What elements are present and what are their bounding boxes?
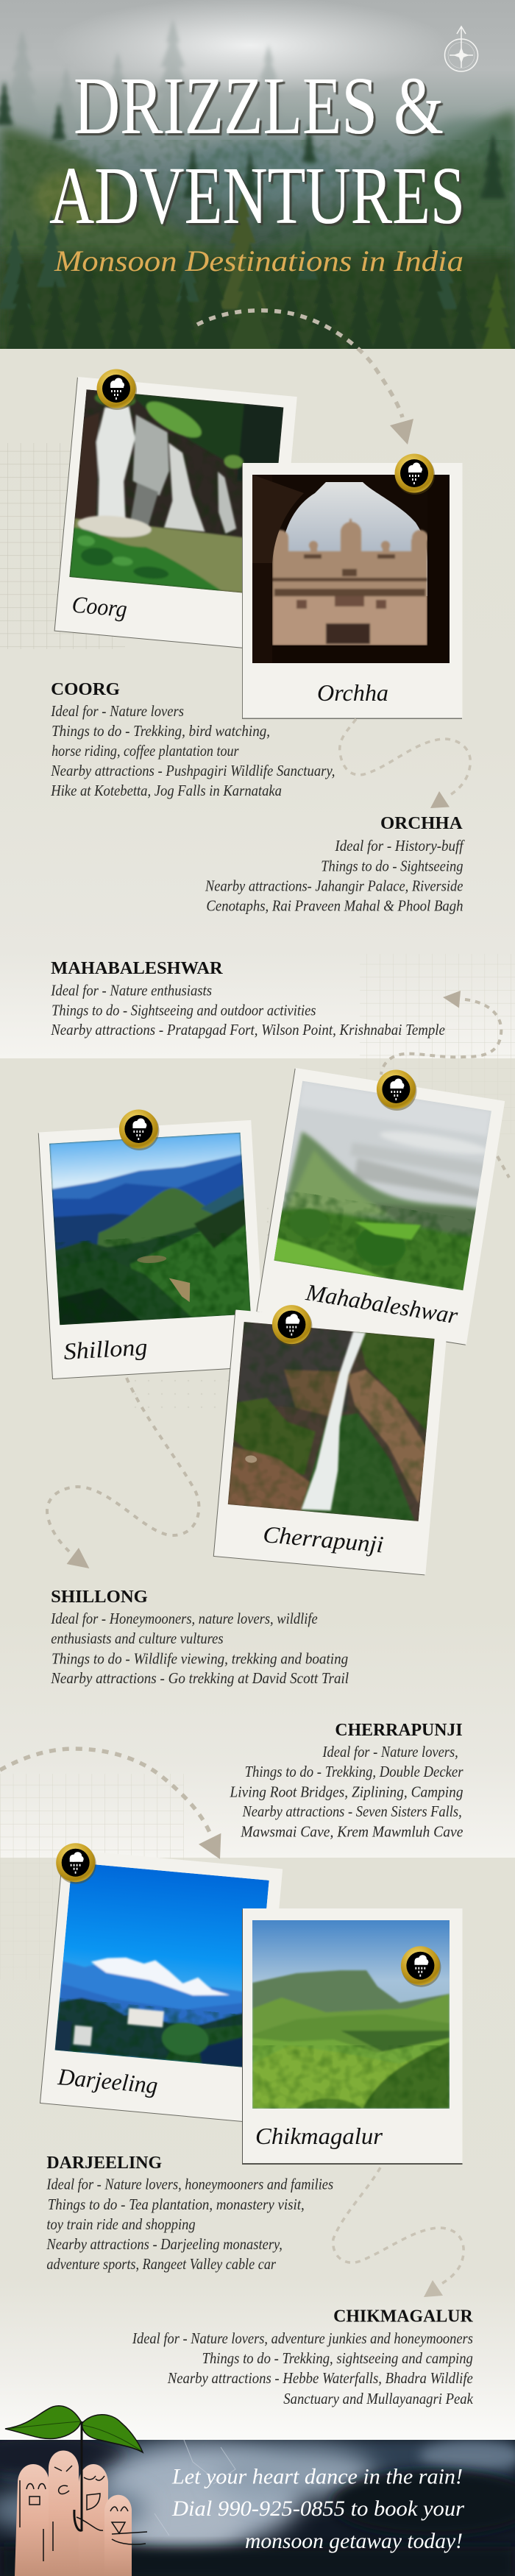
polaroid: orchha <box>242 463 462 719</box>
text block: chikmagalur <box>132 2307 474 2407</box>
body: darjeeling details <box>46 2176 333 2273</box>
page background: section two <box>0 1058 515 1858</box>
arrow: orchha to text <box>340 719 470 808</box>
page background: section three <box>0 1858 515 2440</box>
page background: section one <box>0 349 515 1058</box>
label: chikmagalur: Chikmagalur <box>255 2123 383 2149</box>
call to action text: Let your heart dance in the rain! <box>171 2465 463 2489</box>
call to action text: Dial 990-925-0855 to book your <box>171 2497 464 2521</box>
label: shillong: Shillong <box>63 1334 148 1365</box>
arrow: shillong to text <box>47 1378 199 1568</box>
icon: cherrapunji pin <box>272 1305 312 1346</box>
arrow: hero to orchha <box>197 311 413 445</box>
photo: mahabaleshwar hills <box>274 1080 491 1291</box>
body: darjeeling details: adventure sports, Rangeet Valley cable car <box>46 2255 277 2273</box>
text block: cherrapunji <box>230 1721 464 1841</box>
polaroid: cherrapunji <box>213 1309 447 1575</box>
heading: chikmagalur: CHIKMAGALUR <box>333 2307 473 2326</box>
body: orchha details: Nearby attractions- Jahangir Palace, Riverside <box>205 877 463 895</box>
body: cherrapunji details: Living Root Bridges, Ziplining, Camping <box>230 1783 464 1801</box>
body: shillong details <box>50 1610 349 1687</box>
body: orchha details: Ideal for - History-buff <box>334 837 465 854</box>
body: cherrapunji details: Mawsmai Cave, Krem Mawmluh Cave <box>240 1823 463 1841</box>
photo: cherrapunji falls <box>228 1322 435 1521</box>
body: orchha details: Cenotaphs, Rai Praveen Mahal & Phool Bagh <box>206 896 464 914</box>
body: darjeeling details: toy train ride and shopping <box>46 2215 196 2233</box>
polaroid: darjeeling <box>40 1849 283 2123</box>
body: orchha details: Things to do - Sightseeing <box>321 857 464 874</box>
body: cherrapunji details <box>230 1743 464 1841</box>
body: chikmagalur details: Sanctuary and Mullayanagri Peak <box>283 2390 474 2407</box>
arrow: cherrapunji to darjeeling <box>0 1749 221 1859</box>
heading: darjeeling: DARJEELING <box>46 2154 162 2173</box>
label: darjeeling: Darjeeling <box>56 2063 159 2098</box>
label: coorg: Coorg <box>71 591 128 622</box>
panel: footer call to action <box>0 2406 515 2576</box>
photo: chikmagalur hills <box>252 1920 450 2109</box>
call to action text <box>171 2465 464 2553</box>
body: darjeeling details: Nearby attractions - Darjeeling monastery, <box>46 2235 283 2253</box>
call to action text: monsoon getaway today! <box>245 2529 463 2553</box>
subtitle: Monsoon Destinations in India <box>54 244 464 277</box>
text block: darjeeling <box>46 2154 333 2273</box>
label: cherrapunji: Cherrapunji <box>262 1521 385 1557</box>
body: chikmagalur details: Things to do - Trekking, sightseeing and camping <box>202 2349 473 2367</box>
text block: mahabaleshwar <box>50 959 445 1038</box>
body: shillong details: Things to do - Wildlife viewing, trekking and boating <box>52 1650 348 1668</box>
finger faces <box>20 2466 147 2561</box>
label: orchha: Orchha <box>317 679 388 706</box>
arrow: mahabaleshwar text to photo <box>381 991 509 1178</box>
icon: darjeeling pin <box>56 1843 96 1884</box>
body: mahabaleshwar details: Ideal for - Nature enthusiasts <box>50 982 212 999</box>
body: coorg details: horse riding, coffee plantation tour <box>52 742 239 760</box>
body: chikmagalur details: Ideal for - Nature lovers, adventure junkies and honeymooners <box>132 2329 473 2347</box>
polaroid: coorg <box>54 377 297 651</box>
body: mahabaleshwar details: Nearby attractions - Pratapgad Fort, Wilson Point, Krishnabai Temple <box>50 1021 445 1038</box>
body: darjeeling details: Things to do - Tea plantation, monastery visit, <box>48 2195 305 2213</box>
text block: orchha <box>205 814 465 914</box>
body: darjeeling details: Ideal for - Nature lovers, honeymooners and families <box>46 2176 333 2193</box>
label: mahabaleshwar: Mahabaleshwar <box>304 1278 460 1328</box>
body: coorg details: Hike at Kotebetta, Jog Falls in Karnataka <box>50 782 282 799</box>
body: orchha details <box>205 837 465 914</box>
icon: shillong pin <box>119 1110 159 1150</box>
body: cherrapunji details: Nearby attractions - Seven Sisters Falls, <box>242 1802 462 1820</box>
body: cherrapunji details: Ideal for - Nature lovers, <box>322 1743 458 1761</box>
photo: darjeeling peaks <box>54 1864 269 2067</box>
body: cherrapunji details: Things to do - Trekking, Double Decker <box>245 1763 464 1780</box>
icon: mahabaleshwar pin <box>377 1070 416 1111</box>
text block: shillong <box>50 1588 349 1687</box>
photo: shillong valley <box>49 1132 250 1325</box>
body: coorg details: Nearby attractions - Pushpagiri Wildlife Sanctuary, <box>50 762 335 779</box>
body: shillong details: Nearby attractions - Go trekking at David Scott Trail <box>50 1669 349 1687</box>
body: mahabaleshwar details <box>50 982 445 1038</box>
heading: cherrapunji: CHERRAPUNJI <box>335 1721 463 1740</box>
body: chikmagalur details: Nearby attractions - Hebbe Waterfalls, Bhadra Wildlife <box>167 2369 473 2387</box>
body: mahabaleshwar details: Things to do - Sightseeing and outdoor activities <box>52 1002 316 1019</box>
arrow: chikmagalur to text <box>333 2168 464 2297</box>
panel: hero header <box>0 0 515 353</box>
body: coorg details: Things to do - Trekking, bird watching, <box>52 722 270 740</box>
illustration: finger family <box>5 2406 147 2576</box>
body: coorg details: Ideal for - Nature lovers <box>50 702 184 720</box>
body: shillong details: Ideal for - Honeymooners, nature lovers, wildlife <box>50 1610 318 1627</box>
text block: coorg <box>50 680 335 799</box>
polaroid: shillong <box>38 1120 266 1379</box>
icon: coorg pin <box>97 369 137 410</box>
hero photo: misty forest <box>0 0 515 349</box>
icon: compass <box>444 26 478 71</box>
photo: orchha palace <box>252 475 450 663</box>
photo: coorg waterfall <box>69 389 284 593</box>
heading: shillong: SHILLONG <box>51 1588 148 1607</box>
icon: orchha pin <box>394 453 435 495</box>
icon: chikmagalur pin <box>401 1946 441 1987</box>
umbrella leaves <box>5 2406 143 2530</box>
body: coorg details <box>50 702 335 799</box>
footer photo: storm clouds <box>0 2440 515 2576</box>
body: shillong details: enthusiasts and culture vultures <box>51 1630 224 1647</box>
heading: orchha: ORCHHA <box>380 814 463 833</box>
body: chikmagalur details <box>132 2329 474 2407</box>
heading: mahabaleshwar: MAHABALESHWAR <box>51 959 223 978</box>
title: drizzles and adventures <box>49 61 465 241</box>
heading: coorg: COORG <box>51 680 120 699</box>
fingers <box>15 2451 132 2576</box>
polaroid: mahabaleshwar <box>256 1068 505 1345</box>
polaroid: chikmagalur <box>242 1908 462 2165</box>
